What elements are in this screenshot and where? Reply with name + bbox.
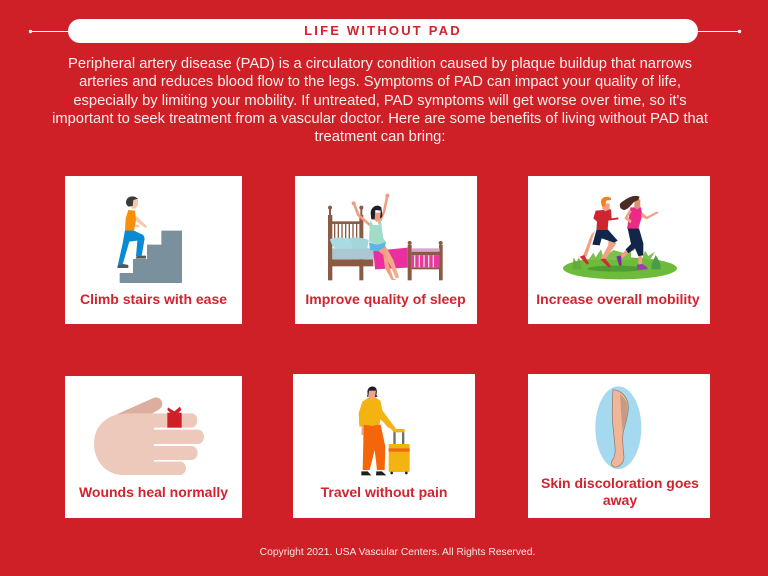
intro paragraph: treatment can bring: [315, 129, 445, 145]
icon: healthy leg in blue oval [595, 386, 642, 469]
panel: overall mobility [528, 176, 710, 324]
intro paragraph [52, 56, 708, 145]
label: Improve quality of sleep [305, 290, 466, 306]
panel: travel [293, 374, 475, 518]
label: Climb stairs with ease [80, 290, 227, 306]
intro paragraph: arteries and reduces blood flow to the legs. Symptoms of PAD can impact your quality of life, [79, 74, 681, 90]
icon: hand with bandaged finger [94, 397, 204, 475]
icon: woman stretching on bed [328, 194, 443, 280]
label: away [603, 492, 637, 508]
intro paragraph: important to seek treatment from a vascular doctor. Here are some benefits of living without PAD that [52, 111, 708, 127]
label: Travel without pain [321, 484, 447, 500]
icon: person climbing stairs [117, 196, 182, 283]
copyright: Copyright 2021. USA Vascular Centers. All Rights Reserved. [260, 547, 535, 558]
label: Increase overall mobility [536, 290, 700, 306]
panel: skin discoloration [528, 374, 710, 518]
icon: two joggers on grass [563, 196, 677, 280]
intro paragraph: Peripheral artery disease (PAD) is a circulatory condition caused by plaque buildup that narrows [68, 56, 692, 72]
panel: climb stairs [65, 176, 242, 324]
panel: wounds heal [65, 376, 242, 518]
header rule [28, 30, 742, 34]
icon: woman with suitcase [358, 386, 410, 476]
title [68, 19, 698, 43]
title: LIFE WITHOUT PAD [304, 23, 462, 38]
intro paragraph: especially by limiting your mobility. If untreated, PAD symptoms will get worse over time, so it's [73, 93, 687, 109]
label [541, 475, 699, 508]
panel: quality of sleep [295, 176, 477, 324]
label: Wounds heal normally [79, 484, 228, 500]
label: Skin discoloration goes [541, 475, 699, 491]
